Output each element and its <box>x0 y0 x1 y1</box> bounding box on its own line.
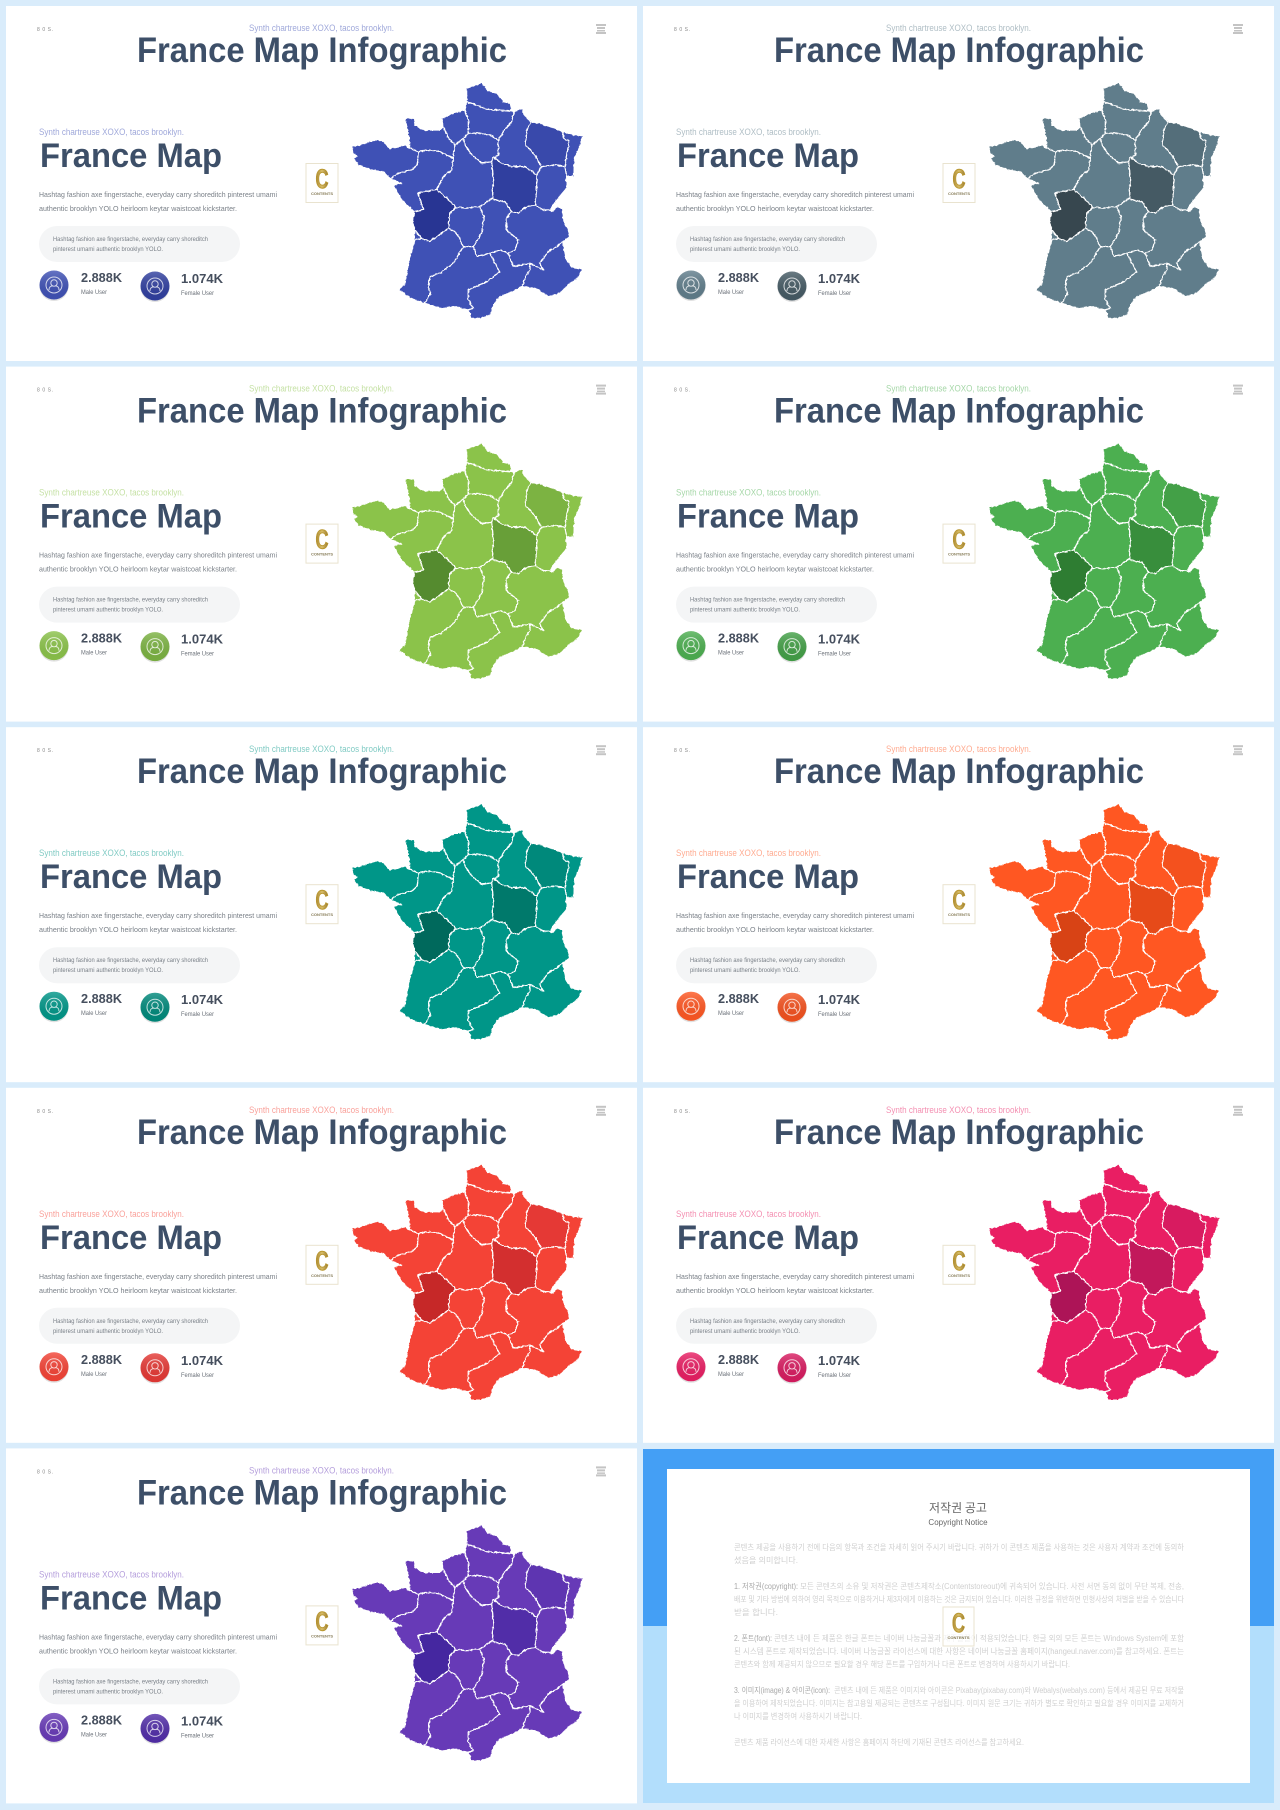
callout pill: pinterest umami authentic brooklyn YOLO. <box>690 608 800 614</box>
callout pill: Hashtag fashion axe fingerstache, everyday carry shoreditch <box>53 598 208 604</box>
page mark: 8 0 S. <box>37 1109 53 1115</box>
notice section 3 <box>734 1685 1184 1721</box>
logo: CONTENTS <box>311 1633 333 1638</box>
subheading: France Map <box>677 858 859 896</box>
notice section 1 <box>734 1581 1185 1617</box>
icon: male user <box>40 1352 68 1383</box>
page mark: 8 0 S. <box>674 748 690 754</box>
logo <box>306 885 338 924</box>
logo: C <box>952 1246 966 1276</box>
paragraph: authentic brooklyn YOLO heirloom keytar waistcoat kickstarter. <box>676 565 874 574</box>
logo <box>306 1606 338 1645</box>
callout pill: pinterest umami authentic brooklyn YOLO. <box>53 1329 163 1335</box>
title: France Map Infographic <box>774 31 1144 70</box>
logo: C <box>952 885 966 915</box>
icon: brand mark <box>1233 745 1243 755</box>
stat: male users <box>81 1712 123 1738</box>
logo <box>943 885 975 924</box>
icon: female user <box>778 632 806 663</box>
icon: female user <box>778 272 806 302</box>
stat: female users: 1.074K <box>818 271 861 286</box>
title: France Map Infographic <box>137 752 507 791</box>
map: France regions <box>352 443 583 679</box>
stat: male users: 2.888K <box>81 1712 123 1727</box>
logo: C <box>316 164 328 194</box>
stat: female users: 1.074K <box>818 632 861 647</box>
subheading: France Map <box>677 137 859 175</box>
eyebrow: Synth chartreuse XOXO, tacos brooklyn. <box>886 384 1031 394</box>
paragraph: Hashtag fashion axe fingerstache, everyday carry shoreditch pinterest umami <box>39 1632 277 1641</box>
paragraph <box>676 551 914 574</box>
paragraph: Hashtag fashion axe fingerstache, everyday carry shoreditch pinterest umami <box>39 911 277 920</box>
callout pill <box>39 1308 240 1344</box>
paragraph <box>39 190 277 213</box>
page mark: 8 0 S. <box>674 27 690 33</box>
map: France regions <box>352 83 583 318</box>
callout pill: Hashtag fashion axe fingerstache, everyday carry shoreditch <box>53 237 208 243</box>
callout pill: pinterest umami authentic brooklyn YOLO. <box>53 968 163 974</box>
stat: male users: Male User <box>718 290 744 296</box>
callout pill: pinterest umami authentic brooklyn YOLO. <box>53 608 163 614</box>
logo: C <box>952 525 966 555</box>
logo: CONTENTS <box>948 1635 970 1640</box>
stat: male users <box>718 991 760 1017</box>
page mark: 8 0 S. <box>674 388 690 394</box>
paragraph: authentic brooklyn YOLO heirloom keytar waistcoat kickstarter. <box>39 1646 237 1655</box>
notice section 3: 콘텐츠 내에 든 제품은 이미지와 아이콘은 Pixabay(pixabay.com)와 Webalys(webalys.com) 등에서 제공된 무료 저작물 <box>834 1685 1184 1695</box>
stat: male users: Male User <box>81 1372 107 1378</box>
stat: female users: 1.074K <box>181 992 224 1007</box>
stat: female users <box>181 1713 224 1739</box>
stat: female users: Female User <box>181 291 214 297</box>
stat: female users: 1.074K <box>181 632 224 647</box>
page mark: 8 0 S. <box>37 748 53 754</box>
paragraph: Hashtag fashion axe fingerstache, everyday carry shoreditch pinterest umami <box>676 551 914 560</box>
stat: male users <box>81 1352 123 1378</box>
callout pill: pinterest umami authentic brooklyn YOLO. <box>690 247 800 253</box>
callout pill: pinterest umami authentic brooklyn YOLO. <box>690 968 800 974</box>
map: France regions <box>352 1525 583 1761</box>
eyebrow: Synth chartreuse XOXO, tacos brooklyn. <box>886 23 1031 33</box>
stat: female users <box>181 271 224 297</box>
stat: female users: Female User <box>818 291 851 297</box>
title: France Map Infographic <box>137 392 507 431</box>
subheading: France Map <box>40 858 222 896</box>
logo <box>943 1607 974 1646</box>
icon: female user <box>140 1714 170 1744</box>
paragraph <box>676 190 914 213</box>
notice intro <box>734 1542 1185 1565</box>
notice heading: 저작권 공고 <box>929 1499 987 1516</box>
stat: male users: 2.888K <box>718 1352 760 1367</box>
stat: female users: Female User <box>181 1012 214 1018</box>
eyebrow: Synth chartreuse XOXO, tacos brooklyn. <box>249 1105 394 1115</box>
paragraph <box>39 1272 277 1295</box>
page mark: 8 0 S. <box>37 27 53 33</box>
icon: male user <box>676 1352 706 1383</box>
logo: C <box>952 164 966 194</box>
subheading: France Map <box>677 1219 859 1257</box>
icon: male user <box>40 631 68 662</box>
logo: CONTENTS <box>311 912 333 917</box>
stat: male users <box>81 270 123 296</box>
title: France Map Infographic <box>137 1473 507 1512</box>
panel: red slide <box>6 1088 637 1443</box>
logo <box>306 1245 338 1284</box>
page mark: 8 0 S. <box>37 388 53 394</box>
notice section 3: 3. 이미지(image) & 아이콘(icon): <box>734 1685 830 1695</box>
logo: C <box>316 885 328 915</box>
logo: CONTENTS <box>948 1273 970 1278</box>
map: France regions <box>989 443 1220 679</box>
subheading eyebrow: Synth chartreuse XOXO, tacos brooklyn. <box>676 848 821 858</box>
subheading: France Map <box>677 498 859 536</box>
panel: pink slide <box>643 1088 1274 1443</box>
stat: male users: 2.888K <box>81 991 123 1006</box>
logo <box>943 524 975 563</box>
stat: female users: 1.074K <box>181 1353 224 1368</box>
icon: male user <box>40 992 68 1022</box>
stat: male users: Male User <box>81 651 107 657</box>
subheading eyebrow: Synth chartreuse XOXO, tacos brooklyn. <box>676 1209 821 1219</box>
stat: female users <box>818 992 861 1018</box>
page mark: 8 0 S. <box>37 1469 53 1475</box>
stat: male users: 2.888K <box>718 270 760 285</box>
callout pill: Hashtag fashion axe fingerstache, everyday carry shoreditch <box>690 598 845 604</box>
map: France regions <box>989 83 1220 318</box>
notice section 2 <box>734 1633 1185 1669</box>
stat: female users <box>818 1353 861 1379</box>
paragraph <box>39 551 277 574</box>
icon: male user <box>40 270 68 301</box>
notice section 3: 을 이용하여 제작되었습니다. 이미지는 참고용일 제공되는 콘텐츠로 구성됩니다. 이미지 원문 크기는 귀하가 별도로 확인하고 필요할 경우 이미지를 교체하거 <box>734 1698 1184 1708</box>
subheading eyebrow: Synth chartreuse XOXO, tacos brooklyn. <box>676 488 821 498</box>
callout pill: Hashtag fashion axe fingerstache, everyday carry shoreditch <box>690 237 845 243</box>
icon: brand mark <box>596 745 606 755</box>
paragraph <box>676 911 914 934</box>
logo: CONTENTS <box>948 191 970 196</box>
panel: copyright notice <box>643 1449 1274 1803</box>
paragraph: authentic brooklyn YOLO heirloom keytar waistcoat kickstarter. <box>39 565 237 574</box>
title: France Map Infographic <box>774 1113 1144 1152</box>
stat: male users: 2.888K <box>81 1352 123 1367</box>
callout pill: Hashtag fashion axe fingerstache, everyday carry shoreditch <box>53 958 208 964</box>
icon: male user <box>676 992 706 1022</box>
notice section 2: 된 시스템 폰트로 제작되었습니다. 네이버 나눔글꼴 라이선스에 대한 사항은 네이버 나눔글꼴 홈페이지(hangeul.naver.com)를 참고하세요. 폰트는 <box>734 1646 1184 1656</box>
paragraph <box>39 1632 277 1655</box>
notice section 3: 나 이미지를 변경하여 사용하시기 바랍니다. <box>734 1711 862 1721</box>
callout pill: pinterest umami authentic brooklyn YOLO. <box>53 1689 163 1695</box>
icon: brand mark <box>1233 24 1243 34</box>
logo: C <box>316 525 328 555</box>
stat: male users: Male User <box>718 1011 744 1017</box>
stat: male users <box>718 1352 760 1378</box>
notice section 1: 받을 합니다. <box>734 1607 778 1617</box>
icon: brand mark <box>1233 1106 1243 1116</box>
panel: light green slide <box>6 367 637 722</box>
logo: C <box>952 1608 965 1638</box>
callout pill: Hashtag fashion axe fingerstache, everyday carry shoreditch <box>53 1319 208 1325</box>
icon: brand mark <box>596 24 606 34</box>
subheading eyebrow: Synth chartreuse XOXO, tacos brooklyn. <box>39 848 184 858</box>
logo: CONTENTS <box>311 191 333 196</box>
stat: female users: Female User <box>818 1012 851 1018</box>
stat: female users: Female User <box>818 1373 851 1379</box>
icon: brand mark <box>596 1106 606 1116</box>
callout pill <box>676 1308 877 1344</box>
icon: female user <box>140 1353 170 1384</box>
map: France regions <box>989 1164 1220 1400</box>
stat: female users: 1.074K <box>181 1713 224 1728</box>
logo <box>943 1245 975 1284</box>
callout pill <box>676 226 877 262</box>
stat: male users <box>81 631 123 657</box>
stat: male users: Male User <box>81 1011 107 1017</box>
logo <box>943 164 975 202</box>
logo: CONTENTS <box>948 552 970 557</box>
logo: CONTENTS <box>311 1273 333 1278</box>
logo <box>306 524 338 563</box>
subheading: France Map <box>40 1219 222 1257</box>
notice section 2: 2. 폰트(font): <box>734 1634 772 1643</box>
notice section 2: 콘텐츠 내에 든 제품은 한글 폰트는 네이버 나눔글꼴과 제주글꼴이 적용되었습니다. 한글 외의 모든 폰트는 Windows System에 포함 <box>774 1633 1185 1643</box>
icon: male user <box>40 1713 68 1743</box>
notice section 1: 모든 콘텐츠의 소유 및 저작권은 콘텐츠제작소(Contentstoreout)에 귀속되어 있습니다. 사전 서면 동의 없이 무단 복제, 전송, <box>800 1581 1184 1591</box>
eyebrow: Synth chartreuse XOXO, tacos brooklyn. <box>249 744 394 754</box>
stat: male users: Male User <box>718 651 744 657</box>
stat: male users <box>81 991 123 1017</box>
paragraph: Hashtag fashion axe fingerstache, everyday carry shoreditch pinterest umami <box>676 190 914 199</box>
callout pill: Hashtag fashion axe fingerstache, everyday carry shoreditch <box>53 1679 208 1685</box>
stat: female users: 1.074K <box>818 1353 861 1368</box>
stat: female users <box>181 1353 224 1379</box>
logo <box>306 164 338 202</box>
subheading eyebrow: Synth chartreuse XOXO, tacos brooklyn. <box>39 1569 184 1579</box>
title: France Map Infographic <box>137 31 507 70</box>
notice subheading: Copyright Notice <box>928 1518 988 1527</box>
icon: male user <box>676 631 706 662</box>
notice section 1: 1. 저작권(copyright): <box>734 1581 798 1591</box>
notice section 1: 배포 및 기타 방법에 의하여 영리 목적으로 이용하거나 제3자에게 이용하는 것은 금지되어 있습니다. 이러한 규정을 위반하면 민형사상의 처벌을 받을 수 있습니다 <box>734 1594 1185 1604</box>
callout pill: pinterest umami authentic brooklyn YOLO. <box>53 247 163 253</box>
paragraph: authentic brooklyn YOLO heirloom keytar waistcoat kickstarter. <box>39 925 237 934</box>
stat: male users: Male User <box>81 1732 107 1738</box>
stat: female users <box>818 632 861 658</box>
stat: male users: Male User <box>718 1372 744 1378</box>
page mark: 8 0 S. <box>674 1109 690 1115</box>
logo: CONTENTS <box>948 912 970 917</box>
paragraph <box>39 911 277 934</box>
eyebrow: Synth chartreuse XOXO, tacos brooklyn. <box>249 23 394 33</box>
callout pill <box>676 947 877 983</box>
paragraph: authentic brooklyn YOLO heirloom keytar waistcoat kickstarter. <box>676 925 874 934</box>
subheading: France Map <box>40 1579 222 1617</box>
title: France Map Infographic <box>137 1113 507 1152</box>
paragraph: Hashtag fashion axe fingerstache, everyday carry shoreditch pinterest umami <box>39 1272 277 1281</box>
eyebrow: Synth chartreuse XOXO, tacos brooklyn. <box>886 744 1031 754</box>
title: France Map Infographic <box>774 752 1144 791</box>
stat: female users: 1.074K <box>181 271 224 286</box>
icon: male user <box>676 270 706 301</box>
title: France Map Infographic <box>774 392 1144 431</box>
eyebrow: Synth chartreuse XOXO, tacos brooklyn. <box>886 1105 1031 1115</box>
stat: male users: 2.888K <box>81 631 123 646</box>
stat: male users <box>718 631 760 657</box>
icon: brand mark <box>1233 385 1243 395</box>
callout pill: Hashtag fashion axe fingerstache, everyday carry shoreditch <box>690 958 845 964</box>
panel: purple slide <box>6 1448 637 1803</box>
icon: female user <box>778 1353 806 1384</box>
icon: brand mark <box>596 385 606 395</box>
eyebrow: Synth chartreuse XOXO, tacos brooklyn. <box>249 1465 394 1475</box>
eyebrow: Synth chartreuse XOXO, tacos brooklyn. <box>249 384 394 394</box>
stat: female users: Female User <box>818 652 851 658</box>
map: France regions <box>352 1164 583 1400</box>
subheading eyebrow: Synth chartreuse XOXO, tacos brooklyn. <box>39 488 184 498</box>
icon: brand mark <box>596 1466 606 1476</box>
map: France regions <box>352 804 583 1040</box>
logo: C <box>316 1606 328 1636</box>
panel: teal slide <box>6 727 637 1082</box>
notice intro: 셨음을 의미합니다. <box>734 1555 798 1565</box>
stat: female users: 1.074K <box>818 992 861 1007</box>
stat: female users <box>181 992 224 1018</box>
panel: orange slide <box>643 727 1274 1082</box>
stat: male users: 2.888K <box>81 270 123 285</box>
paragraph: Hashtag fashion axe fingerstache, everyday carry shoreditch pinterest umami <box>39 551 277 560</box>
subheading: France Map <box>40 498 222 536</box>
callout pill <box>39 587 240 623</box>
logo: CONTENTS <box>311 552 333 557</box>
paragraph: authentic brooklyn YOLO heirloom keytar waistcoat kickstarter. <box>676 204 874 213</box>
callout pill <box>39 226 240 262</box>
icon: female user <box>140 632 170 663</box>
callout pill <box>39 1668 240 1704</box>
subheading eyebrow: Synth chartreuse XOXO, tacos brooklyn. <box>39 1209 184 1219</box>
icon: female user <box>140 272 170 302</box>
paragraph: authentic brooklyn YOLO heirloom keytar waistcoat kickstarter. <box>39 1286 237 1295</box>
logo: C <box>316 1246 328 1276</box>
icon: female user <box>140 993 170 1023</box>
notice footer: 콘텐츠 제품 라이선스에 대한 자세한 사항은 홈페이지 하단에 기재된 콘텐츠 라이선스를 참고하세요. <box>734 1737 1024 1747</box>
map: France regions <box>989 804 1220 1040</box>
stat: male users: 2.888K <box>718 991 760 1006</box>
paragraph <box>676 1272 914 1295</box>
paragraph: Hashtag fashion axe fingerstache, everyday carry shoreditch pinterest umami <box>676 1272 914 1281</box>
stat: female users: Female User <box>181 1733 214 1739</box>
paragraph: authentic brooklyn YOLO heirloom keytar waistcoat kickstarter. <box>676 1286 874 1295</box>
notice section 2: 콘텐츠와 함께 제공되지 않으므로 필요할 경우 해당 폰트를 구입하거나 다른 폰트로 변경하여 사용하시기 바랍니다. <box>734 1659 1070 1669</box>
callout pill: Hashtag fashion axe fingerstache, everyday carry shoreditch <box>690 1319 845 1325</box>
panel: indigo slide <box>6 6 637 361</box>
callout pill: pinterest umami authentic brooklyn YOLO. <box>690 1329 800 1335</box>
stat: male users <box>718 270 760 296</box>
paragraph: Hashtag fashion axe fingerstache, everyday carry shoreditch pinterest umami <box>39 190 277 199</box>
paragraph: Hashtag fashion axe fingerstache, everyday carry shoreditch pinterest umami <box>676 911 914 920</box>
stat: female users: Female User <box>181 652 214 658</box>
callout pill <box>39 947 240 983</box>
stat: female users <box>181 632 224 658</box>
stat: male users: 2.888K <box>718 631 760 646</box>
icon: female user <box>778 993 806 1023</box>
stat: female users <box>818 271 861 297</box>
panel: green slide <box>643 367 1274 722</box>
stat: male users: Male User <box>81 290 107 296</box>
callout pill <box>676 587 877 623</box>
subheading: France Map <box>40 137 222 175</box>
subheading eyebrow: Synth chartreuse XOXO, tacos brooklyn. <box>39 127 184 137</box>
stat: female users: Female User <box>181 1373 214 1379</box>
notice intro: 콘텐츠 제공을 사용하기 전에 다음의 항목과 조건을 자세히 읽어 주시기 바랍니다. 귀하가 이 콘텐츠 제품을 사용하는 것은 사용자 계약과 조건에 동의하 <box>734 1542 1185 1552</box>
paragraph: authentic brooklyn YOLO heirloom keytar waistcoat kickstarter. <box>39 204 237 213</box>
subheading eyebrow: Synth chartreuse XOXO, tacos brooklyn. <box>676 127 821 137</box>
panel: blue-grey slide <box>643 6 1274 361</box>
